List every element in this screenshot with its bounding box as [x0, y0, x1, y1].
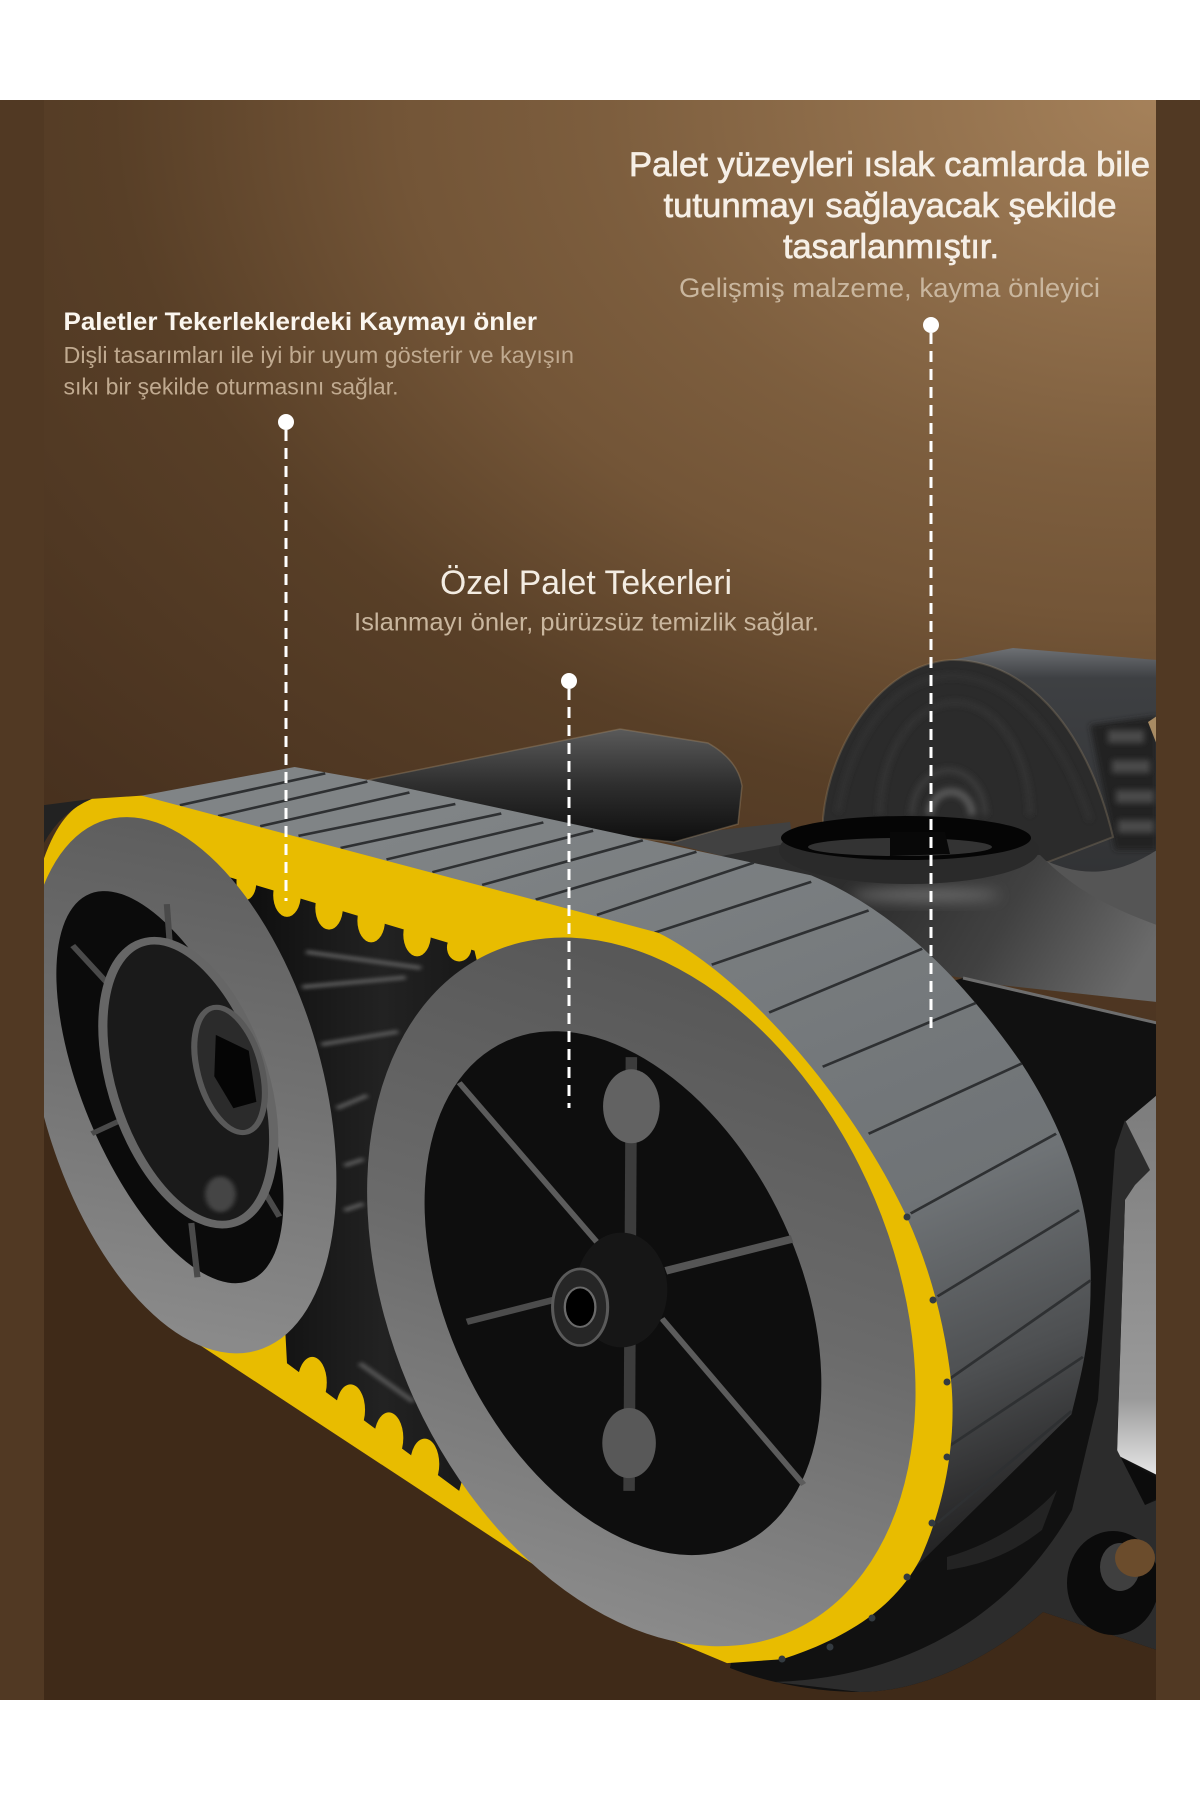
callout line: left — [278, 414, 294, 901]
right flange — [1040, 850, 1157, 925]
back plate — [952, 648, 1156, 872]
bracket with hole — [1067, 1531, 1159, 1635]
text block: left callout: sıkı bir şekilde oturmasını sağlar. — [64, 374, 398, 400]
skirt highlight — [850, 889, 1000, 901]
metal side piece — [1117, 1095, 1157, 1475]
lower blade — [947, 1490, 1057, 1570]
text block: right heading — [629, 146, 1150, 266]
spokes — [459, 1057, 804, 1491]
callout line: center — [561, 673, 577, 1108]
belt: yellow — [44, 796, 953, 1663]
hub — [553, 1233, 667, 1347]
front wheel — [367, 938, 916, 1646]
text block: right heading: Palet yüzeyleri ıslak camlarda bile — [629, 146, 1150, 184]
text block: left callout — [64, 308, 574, 400]
text block: right heading: tasarlanmıştır. — [783, 228, 999, 266]
fan disk — [823, 660, 1113, 865]
text block: right heading: tutunmayı sağlayacak şekilde — [664, 187, 1116, 225]
black notch under metal — [1120, 1458, 1157, 1505]
belt edge notches — [778, 1214, 950, 1662]
gray frame band — [775, 1120, 1157, 1692]
text block: center callout: Özel Palet Tekerleri — [440, 564, 732, 602]
illustration: track wheel assembly — [0, 648, 1159, 1700]
right black body — [730, 978, 1157, 1692]
text: right subheading: Gelişmiş malzeme, kayma önleyici — [679, 273, 1100, 303]
rear wheel — [44, 817, 336, 1354]
tread grooves — [180, 773, 1091, 1523]
text block: left callout: Dişli tasarımları ile iyi bir uyum gösterir ve kayışın — [64, 342, 574, 368]
bowl rim — [779, 816, 1039, 884]
base flange — [663, 822, 791, 856]
belt teeth — [236, 864, 471, 1490]
tread surface — [142, 767, 1091, 1580]
motor housing — [368, 729, 742, 842]
text block: center callout: Islanmayı önler, pürüzsüz temizlik sağlar. — [354, 608, 819, 636]
text block: center callout — [354, 564, 819, 636]
callout line: right — [923, 317, 939, 1030]
body top edge — [963, 978, 1157, 1023]
bowl skirt — [700, 845, 1157, 1002]
inner gear — [230, 877, 477, 1491]
corner shadow — [44, 799, 92, 844]
gear teeth at back — [1090, 716, 1157, 850]
text block: left callout: Paletler Tekerleklerdeki Kaymayı önler — [64, 308, 537, 336]
